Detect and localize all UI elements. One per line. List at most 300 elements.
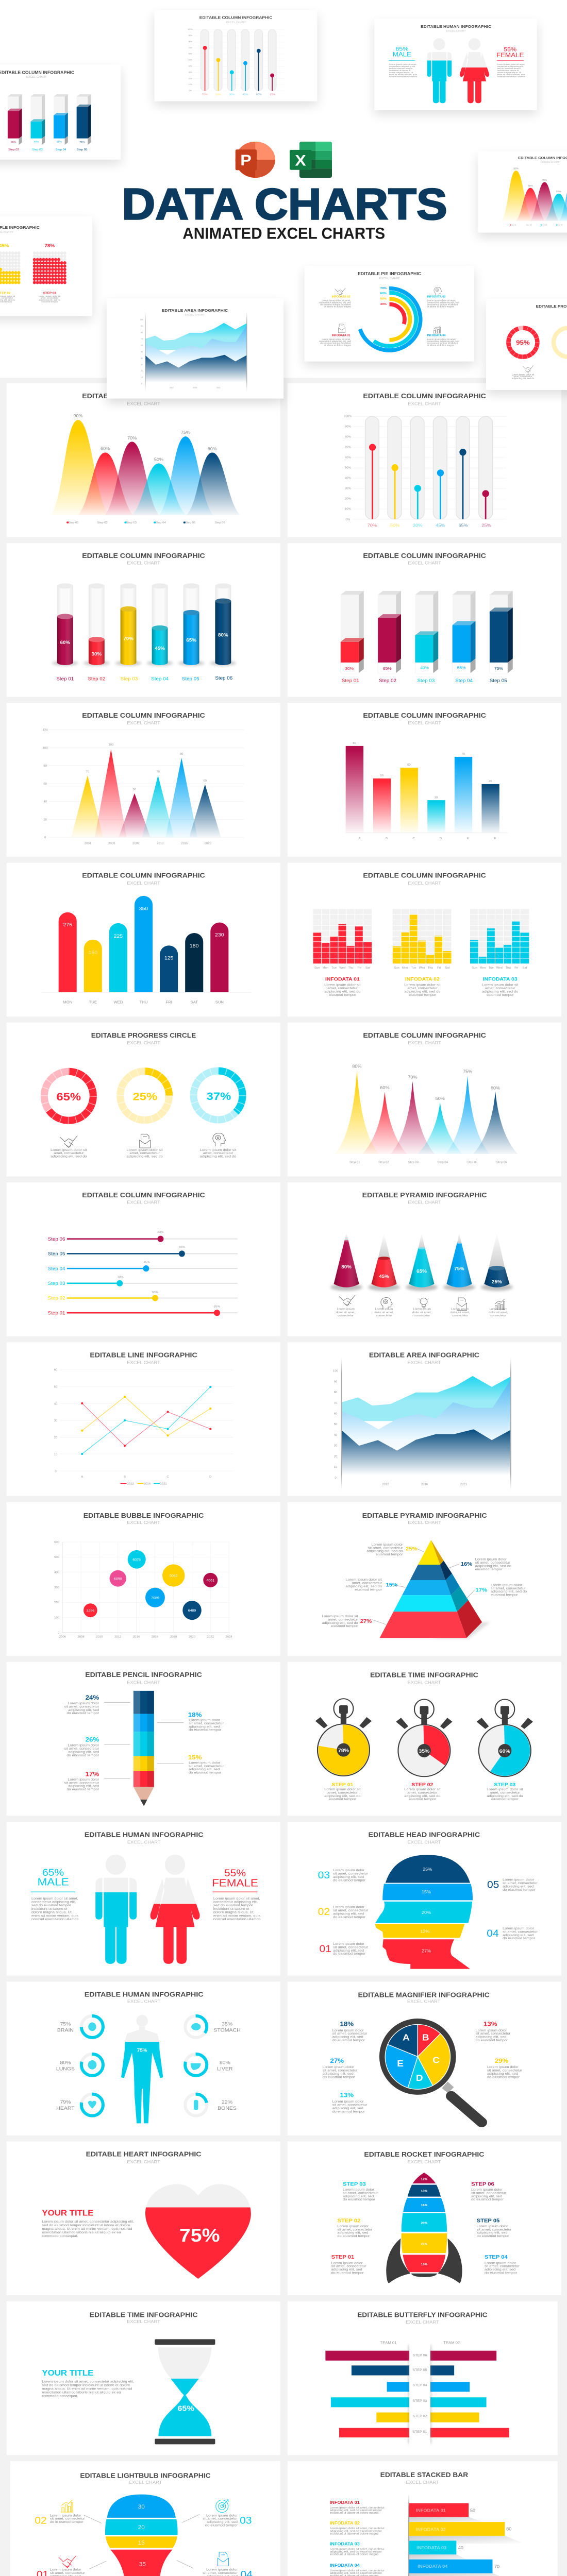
- heading: EDITABLE ROCKET INFOGRAPHIC: [364, 2151, 485, 2158]
- heading: EXCEL CHART: [127, 721, 160, 725]
- chart: rounded bars: FRI: [165, 1000, 172, 1004]
- chart: 3D boxes: 40%: [420, 666, 429, 670]
- chart: three lines: 60: [54, 1369, 57, 1372]
- chart: three rings: amet, consectetur: [54, 1151, 84, 1155]
- chart: 3D boxes: 65%: [383, 666, 392, 671]
- chart: rocket: 21%: [421, 2243, 428, 2246]
- chart: sliders: 50%: [152, 1291, 158, 1294]
- heading: EXCEL CHART: [408, 1840, 441, 1844]
- chart: magnifier pie: adipiscing elit, sed: [476, 2036, 507, 2039]
- chart: magnifier pie: sit amet, consectetur: [487, 2069, 522, 2072]
- chart: head segments: do eiusmod tempor: [333, 1916, 366, 1919]
- chart: spikes: [335, 1064, 518, 1164]
- chart: pencil: do eiusmod tempor: [189, 1728, 222, 1732]
- chart: rocket: STEP 03: [343, 2181, 366, 2187]
- chart: bubbles: 2008: [78, 1636, 85, 1638]
- chart: triangles: 2015: [181, 842, 188, 845]
- chart: ribbons: adipiscing elit, sed do eiusmod tempor: [330, 2551, 382, 2553]
- chart: cones: 65%: [416, 1269, 427, 1274]
- chart: rocket: STEP 05: [477, 2218, 499, 2224]
- chart: head segments: Lorem ipsum dolor: [503, 1927, 534, 1930]
- chart: head segments: 01: [319, 1944, 331, 1955]
- chart: gradient bars: 30: [435, 796, 438, 799]
- chart: 3D boxes: Step 05: [490, 679, 507, 683]
- chart: tubes with lollipops: 70%: [345, 446, 351, 449]
- chart: pencil: sit amet, consectetur: [189, 1722, 224, 1725]
- chart: three lines: A: [81, 1476, 83, 1479]
- chart: three segmented bar grids: [313, 909, 529, 997]
- chart: sliders: Step 01: [48, 1311, 65, 1315]
- chart: cones: dolor sit amet,: [451, 1311, 470, 1314]
- chart: head segments: adipiscing elit, sed: [503, 1885, 533, 1888]
- chart: three rings: 25%: [132, 1090, 157, 1103]
- chart: head segments: sit amet, consectetur: [503, 1930, 538, 1934]
- chart: bubbles: 2012: [114, 1636, 121, 1638]
- panel: pixel heatmap bars: [288, 863, 561, 1016]
- chart: layered area: 80: [334, 1391, 337, 1394]
- chart: spikes: Step 06: [496, 1161, 507, 1164]
- panel: progress circles: [7, 1023, 280, 1176]
- chart: pencil: adipiscing elit, sed: [68, 1708, 99, 1712]
- chart: bubbles: 600: [54, 1541, 59, 1544]
- chart: head segments: Lorem ipsum dolor: [503, 1878, 534, 1882]
- heading: EDITABLE COLUMN INFOGRAPHIC: [82, 393, 205, 400]
- chart: three lines: D: [209, 1476, 211, 1479]
- chart: magnifier pie: Lorem ipsum dolor: [332, 2029, 364, 2032]
- chart: gradient bars: D: [440, 837, 442, 840]
- heading: EDITABLE COLUMN INFOGRAPHIC: [82, 1192, 205, 1199]
- heading: EXCEL CHART: [408, 1200, 442, 1205]
- chart: tubes with lollipops: 10%: [345, 508, 351, 511]
- chart: human figures: enim ad minim veniam, quis: [213, 1914, 260, 1918]
- chart: spikes: 70%: [408, 1075, 418, 1079]
- chart: spikes: Step 01: [349, 1161, 360, 1164]
- chart: magnifier pie: sit amet, consectetur: [332, 2104, 368, 2107]
- chart: cylinders: 70%: [123, 636, 134, 641]
- chart: three segmented bar grids: Thu: [428, 967, 433, 970]
- chart: three segmented bar grids: Fri: [437, 967, 441, 970]
- chart: three segmented bar grids: Wed: [419, 967, 425, 970]
- chart: three rings: Lorem ipsum dolor sit: [200, 1148, 236, 1152]
- chart: triangles: 90: [180, 753, 183, 756]
- chart: pencil: sit amet, consectetur: [189, 1765, 224, 1768]
- chart: rocket: sit amet, consectetur: [477, 2228, 512, 2231]
- heading: [90, 2311, 198, 2324]
- heading: EXCEL CHART: [408, 401, 442, 406]
- chart: body and organ rings: LUNGS: [56, 2066, 75, 2072]
- chart: rocket: 16%: [421, 2204, 428, 2207]
- chart: bubbles: 2020: [189, 1636, 195, 1638]
- chart: sliders: 30%: [118, 1276, 124, 1279]
- chart: tubes with lollipops: 0%: [346, 518, 350, 521]
- panel: thermometer column chart: [288, 383, 561, 537]
- chart: gradient bars: 45: [489, 780, 492, 783]
- chart: magnifier pie: adipiscing elit, sed: [332, 2036, 363, 2039]
- chart: body and organ rings: 22%: [222, 2099, 232, 2105]
- chart: magnifier pie: E: [397, 2059, 404, 2069]
- chart: rounded bars: TUE: [89, 1000, 97, 1004]
- chart: bell curves: Step 06: [214, 521, 225, 524]
- chart: human figures: Lorem ipsum dolor sit amet,: [213, 1897, 260, 1901]
- chart: three segmented bar grids: Tue: [411, 967, 416, 970]
- chart: lightbulb: adipiscing elit, sed: [207, 2520, 238, 2524]
- chart: pencil: Lorem ipsum dolor: [68, 1744, 99, 1748]
- chart: cylinders: 60%: [60, 640, 71, 645]
- chart: lightbulb: 03: [240, 2515, 252, 2526]
- chart: cones: dolor sit amet,: [374, 1311, 394, 1314]
- chart: pencil: Lorem ipsum dolor: [68, 1778, 99, 1782]
- chart: stopwatches: eiusmod tempor: [409, 1798, 436, 1801]
- chart: bubbles: 0: [58, 1632, 59, 1635]
- chart: head segments: 15%: [422, 1889, 431, 1894]
- panel: heart: [7, 2142, 280, 2295]
- heading: [364, 2151, 485, 2164]
- chart: magnifier pie: B: [422, 2032, 429, 2042]
- heading: EDITABLE HUMAN INFOGRAPHIC: [85, 1991, 204, 1998]
- chart: human figures: 65%: [42, 1868, 64, 1878]
- chart: three segmented bar grids: adipiscing elit, sed do: [482, 990, 518, 993]
- chart: pyramid: eiusmod tempor: [355, 1588, 382, 1591]
- chart: rocket: Lorem ipsum dolor: [485, 2262, 516, 2265]
- heading: EDITABLE PROGRESS CIRCLE: [91, 1032, 196, 1039]
- chart: three lines: [54, 1369, 233, 1485]
- heading: EXCEL CHART: [127, 2159, 160, 2164]
- chart: cylinders: Step 03: [121, 676, 138, 681]
- chart: rocket: Lorem ipsum dolor: [477, 2225, 508, 2228]
- chart: pyramid: 16%: [461, 1561, 473, 1567]
- chart: human figures: MALE: [38, 1876, 69, 1888]
- chart: hourglass: Lorem ipsum dolor sit amet, consectetur adipiscing elit,: [42, 2380, 134, 2383]
- panel: 3D pyramid: [288, 1502, 561, 1656]
- heading: [380, 2471, 468, 2485]
- chart: cylinders: Step 04: [151, 676, 169, 681]
- chart: three segmented bar grids: Tue: [489, 967, 494, 970]
- chart: gradient bars: 70: [461, 753, 465, 756]
- heading: [369, 1831, 480, 1844]
- chart: cones: dolor sit amet,: [336, 1311, 356, 1314]
- chart: three rings: adipiscing elit, sed do: [127, 1155, 163, 1158]
- chart: pencil: Lorem ipsum dolor: [68, 1702, 99, 1705]
- chart: tubes with lollipops: 50%: [390, 523, 399, 528]
- heading: EDITABLE PYRAMID INFOGRAPHIC: [362, 1192, 487, 1199]
- chart: bell curves: [51, 414, 241, 524]
- chart: three segmented bar grids: Sun: [394, 967, 399, 970]
- heading: EDITABLE COLUMN INFOGRAPHIC: [82, 711, 205, 719]
- chart: triangles: 50: [133, 788, 136, 791]
- chart: cylinders: 45%: [155, 646, 165, 651]
- chart: bubbles: 4061: [206, 1579, 214, 1582]
- chart: triangles: 2003: [108, 842, 115, 845]
- hero card: 3D bars preview: [0, 65, 121, 164]
- chart: tubes with lollipops: 80%: [345, 436, 351, 438]
- chart: cones: consectetur: [376, 1314, 392, 1317]
- chart: tubes with lollipops: 90%: [345, 426, 351, 428]
- heading: EXCEL CHART: [408, 1360, 441, 1365]
- panel: 3D box column chart: [288, 543, 561, 697]
- chart: three segmented bar grids: Wed: [496, 967, 503, 970]
- chart: three segmented bar grids: amet, consectetur: [407, 987, 438, 990]
- chart: pyramid: sit amet, consectetur: [475, 1561, 510, 1565]
- heading: EDITABLE LINE INFOGRAPHIC: [90, 1351, 197, 1359]
- chart: body and organ rings: 80%: [60, 2060, 71, 2065]
- heading: [82, 1192, 205, 1205]
- chart: pyramid: sit amet, consectetur: [368, 1547, 403, 1550]
- chart: body and organ rings: 80%: [220, 2060, 230, 2065]
- chart: layered area: 10: [334, 1466, 337, 1469]
- chart: butterfly bars: STEP 06: [413, 2354, 427, 2357]
- chart: three segmented bar grids: INFODATA 03: [483, 977, 518, 982]
- hero logo: PowerPoint icon: P: [240, 151, 252, 168]
- chart: body and organ rings: STOMACH: [213, 2028, 241, 2033]
- chart: layered area: 2016: [421, 1483, 428, 1486]
- chart: pyramid: eiusmod tempor: [475, 1568, 503, 1571]
- chart: head segments: sit amet, consectetur: [333, 1872, 369, 1875]
- chart: 3D boxes: 75%: [494, 666, 503, 671]
- chart: stopwatches: 78%: [338, 1748, 349, 1753]
- heading: [82, 711, 205, 725]
- chart: bubbles: 300: [54, 1586, 59, 1589]
- chart: human figures: incididunt ut labore et: [213, 1907, 249, 1911]
- heading: [363, 393, 486, 406]
- panel: 3D cones: [288, 1182, 561, 1336]
- chart: butterfly bars: STEP 04: [413, 2384, 427, 2387]
- chart: stopwatches: Lorem ipsum dolor sit: [404, 1788, 440, 1791]
- chart: sliders: Step 03: [48, 1281, 65, 1286]
- chart: triangles: 20: [43, 819, 47, 821]
- heading: [80, 2472, 211, 2485]
- chart: bell curves: Step 03: [126, 521, 137, 524]
- chart: human figures: consectetur adipiscing elit,: [31, 1901, 76, 1904]
- chart: spikes: Step 04: [437, 1161, 448, 1164]
- chart: magnifier pie: do eiusmod tempor: [476, 2039, 508, 2042]
- chart: pyramid: eiusmod tempor: [491, 1594, 518, 1597]
- chart: three lines: C: [166, 1476, 169, 1479]
- chart: three lines: 50: [54, 1386, 57, 1388]
- chart: three segmented bar grids: amet, consectetur: [485, 987, 515, 990]
- chart: triangles: 0: [44, 836, 46, 839]
- heading: [358, 1991, 490, 2004]
- heading: EXCEL CHART: [127, 1999, 161, 2004]
- chart: cylinders: 80%: [218, 633, 228, 637]
- chart: magnifier pie: C: [432, 2055, 440, 2065]
- heading: [362, 1512, 487, 1525]
- chart: tubes with lollipops: 30%: [345, 487, 351, 490]
- chart: three lines: 10: [54, 1453, 57, 1456]
- chart: gradient bars: 50: [380, 774, 383, 777]
- panel: cylinder column chart: [7, 543, 280, 697]
- chart: human figures: consectetur adipiscing elit,: [213, 1901, 258, 1904]
- chart: rocket: 12%: [421, 2178, 428, 2181]
- heading: EXCEL CHART: [127, 1040, 160, 1045]
- chart: human figures: nostrud exercitation ullamco: [213, 1918, 260, 1921]
- chart: magnifier pie: Lorem ipsum dolor: [332, 2100, 364, 2104]
- panel: pencil: [7, 1662, 280, 1816]
- chart: head segments: Lorem ipsum dolor: [333, 1942, 364, 1946]
- heading: EXCEL CHART: [408, 1520, 442, 1525]
- chart: three segmented bar grids: adipiscing elit, sed do: [404, 990, 441, 993]
- chart: rounded bars: THU: [140, 1000, 147, 1004]
- chart: tubes with lollipops: [344, 415, 506, 528]
- chart: stopwatches: 60%: [499, 1749, 510, 1754]
- chart: heart fill: 75%: [179, 2225, 220, 2246]
- chart: cylinders: 30%: [91, 652, 102, 656]
- chart: 3D boxes: 55%: [457, 666, 466, 670]
- chart: pyramid: Lorem ipsum dolor: [475, 1558, 507, 1562]
- chart: three lines: 2016: [144, 1483, 151, 1485]
- chart: lightbulb: sit amet, consectetur: [50, 2571, 85, 2575]
- chart: rocket: STEP 01: [331, 2255, 354, 2260]
- heading: EXCEL CHART: [408, 2159, 441, 2164]
- chart: stopwatches: amet, consectetur: [490, 1791, 520, 1794]
- chart: cones: consectetur: [490, 1314, 506, 1317]
- heading: [85, 1831, 204, 1844]
- chart: heart fill: YOUR TITLE: [42, 2209, 94, 2217]
- heading: EDITABLE COLUMN INFOGRAPHIC: [82, 552, 205, 560]
- heading: EDITABLE COLUMN INFOGRAPHIC: [363, 393, 486, 400]
- chart: sliders: Step 05: [48, 1251, 65, 1257]
- chart: head segments: sit amet, consectetur: [503, 1882, 538, 1885]
- heading: [363, 552, 486, 566]
- chart: lightbulb: 35: [139, 2562, 146, 2567]
- chart: layered area: 40: [334, 1434, 337, 1437]
- chart: spikes: 50%: [436, 1096, 445, 1101]
- panel: human body organs: [7, 1981, 280, 2136]
- panel: rounded weekly bars: [7, 863, 280, 1016]
- heading: [82, 872, 205, 886]
- chart: tubes with lollipops: 40%: [345, 477, 351, 480]
- chart: ribbons: incididunt ut labore et dolore magna: [330, 2533, 379, 2535]
- chart: human figures: enim ad minim veniam, quis: [31, 1914, 79, 1918]
- chart: bell curves: Step 01: [68, 521, 79, 524]
- chart: tubes with lollipops: 20%: [345, 498, 351, 501]
- chart: gradient bars: C: [412, 837, 415, 840]
- hero card: human preview: [374, 19, 537, 115]
- chart: head segments: do eiusmod tempor: [503, 1937, 536, 1940]
- chart: head segments: 04: [487, 1928, 499, 1939]
- chart: rocket: do eiusmod tempor: [477, 2234, 509, 2238]
- chart: three segmented bar grids: Mon: [402, 967, 408, 970]
- chart: triangles: 100: [43, 747, 48, 750]
- chart: ribbons: INFODATA 01: [416, 2508, 446, 2513]
- chart: bubbles: 6489: [188, 1609, 196, 1613]
- chart: rocket: do eiusmod tempor: [471, 2198, 504, 2201]
- chart: bubbles: 100: [54, 1617, 59, 1619]
- chart: three rings: 37%: [207, 1090, 231, 1103]
- hero card: progress circle preview: 95%: [516, 339, 530, 346]
- chart: butterfly bars: STEP 05: [413, 2368, 427, 2372]
- chart: sliders: 65%: [179, 1246, 185, 1249]
- chart: spikes: 75%: [463, 1069, 472, 1074]
- chart: head segments: 13%: [420, 1929, 430, 1934]
- chart: pyramid: adipiscing elit, sed do: [366, 1550, 403, 1553]
- chart: head segments: adipiscing elit, sed: [333, 1912, 364, 1916]
- heading: EXCEL CHART: [127, 561, 160, 566]
- chart: spikes: 60%: [380, 1085, 390, 1090]
- chart: triangles: [43, 729, 244, 845]
- chart: pyramid: 17%: [476, 1587, 487, 1593]
- chart: bubbles: 2014: [133, 1636, 140, 1638]
- chart: lightbulb: Lorem ipsum dolor: [206, 2568, 238, 2571]
- heading: EDITABLE TIME INFOGRAPHIC: [90, 2311, 198, 2318]
- chart: hourglass: YOUR TITLE: [42, 2369, 94, 2378]
- chart: stopwatches: eiusmod tempor: [329, 1798, 356, 1801]
- hero card: progress circle preview: Lorem ipsum dolor sit: [512, 374, 534, 376]
- chart: cones: [330, 1233, 513, 1317]
- chart: cones: dolor sit amet,: [489, 1311, 508, 1314]
- heading: [363, 711, 486, 725]
- chart: three rings: Lorem ipsum dolor sit: [51, 1148, 87, 1152]
- chart: ribbons: adipiscing elit, sed do eiusmod tempor: [330, 2530, 382, 2533]
- chart: pyramid: Lorem ipsum dolor: [491, 1584, 522, 1587]
- chart: tubes with lollipops: 60%: [345, 456, 351, 460]
- chart: triangles: 2001: [85, 842, 91, 845]
- heading: EXCEL CHART: [127, 1520, 160, 1525]
- chart: bell curves: Step 04: [155, 521, 166, 524]
- chart: magnifier pie: Lorem ipsum dolor: [323, 2065, 354, 2069]
- chart: tubes with lollipops: 30%: [413, 523, 423, 528]
- chart: three rings: adipiscing elit, sed do: [51, 1155, 87, 1158]
- chart: magnifier pie: 27%: [330, 2057, 344, 2064]
- heading: EXCEL CHART: [408, 561, 442, 566]
- hero logo: Excel icon: [290, 142, 332, 178]
- chart: head segments: do eiusmod tempor: [333, 1952, 366, 1956]
- hero card: progress circle preview: [486, 299, 567, 395]
- chart: cylinders: Step 02: [88, 676, 105, 681]
- chart: spikes: Step 05: [467, 1161, 477, 1164]
- heading: EDITABLE BUTTERFLY INFOGRAPHIC: [357, 2311, 488, 2318]
- chart: pencil: Lorem ipsum dolor: [189, 1719, 220, 1722]
- chart: magnifier pie: sit amet, consectetur: [476, 2032, 511, 2036]
- chart: pencil: 17%: [86, 1770, 99, 1778]
- chart: three segmented bar grids: amet, consectetur: [327, 987, 358, 990]
- chart: triangles: 40: [43, 801, 47, 803]
- chart: pencil: 24%: [86, 1694, 99, 1701]
- chart: head segments: 02: [318, 1907, 330, 1918]
- chart: stopwatches: Lorem ipsum dolor sit: [487, 1788, 523, 1791]
- heading: [363, 1032, 486, 1045]
- chart: bubbles: 2022: [207, 1636, 214, 1638]
- chart: rounded bars: 275: [63, 923, 72, 928]
- chart: head segments: Lorem ipsum dolor: [333, 1906, 364, 1909]
- chart: layered area: 20: [334, 1455, 337, 1458]
- chart: cones: Lorem ipsum: [490, 1308, 507, 1311]
- chart: pencil: adipiscing elit, sed: [68, 1751, 99, 1754]
- panel: bubble chart: [7, 1502, 280, 1656]
- chart: rocket: sit amet, consectetur: [331, 2265, 366, 2268]
- chart: pencil: do eiusmod tempor: [66, 1754, 99, 1757]
- chart: magnifier pie: Lorem ipsum dolor: [487, 2065, 519, 2069]
- chart: three rings: [44, 1071, 243, 1158]
- hero card: progress circle preview: adipiscing elit, sed do: [512, 377, 535, 380]
- chart: lightbulb: Lorem ipsum dolor: [50, 2568, 81, 2571]
- chart: rocket: adipiscing elit, sed: [485, 2268, 515, 2272]
- chart: triangles: 2010: [157, 842, 163, 845]
- chart: three segmented bar grids: Thu: [348, 967, 354, 970]
- heading: EDITABLE MAGNIFIER INFOGRAPHIC: [358, 1991, 490, 1998]
- heading: [369, 1351, 479, 1365]
- heading: EXCEL CHART: [408, 1040, 442, 1045]
- chart: pyramid: eiusmod tempor: [376, 1553, 403, 1556]
- chart: bubbles: 2016: [152, 1636, 158, 1638]
- chart: three lines: 2012: [127, 1483, 134, 1485]
- hero logo: PowerPoint icon: [236, 142, 275, 178]
- chart: bubbles: 500: [54, 1556, 59, 1559]
- chart: cones: 80%: [341, 1264, 352, 1269]
- chart: rocket: adipiscing elit, sed: [477, 2231, 508, 2235]
- chart: magnifier pie: sit amet, consectetur: [323, 2069, 358, 2072]
- chart: three rings: adipiscing elit, sed do: [200, 1155, 236, 1158]
- heading: [370, 1671, 478, 1685]
